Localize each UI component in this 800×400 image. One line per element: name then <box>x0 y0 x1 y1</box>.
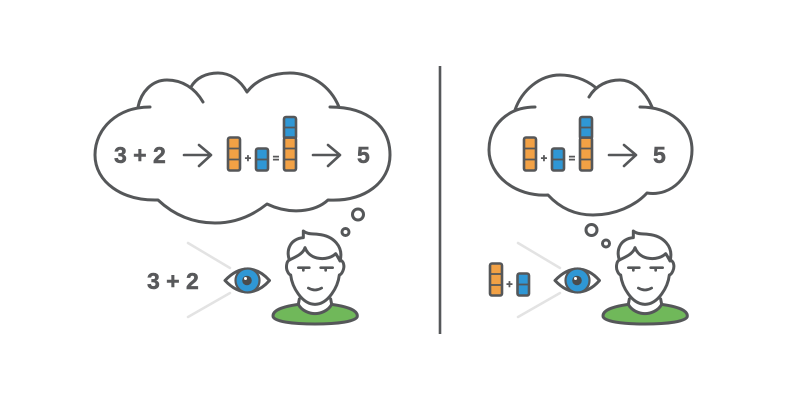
block stack: two blue <box>518 274 529 296</box>
shirt <box>603 304 687 324</box>
divider <box>439 66 441 334</box>
shirt <box>273 304 357 324</box>
panel: left <box>95 73 390 324</box>
plus sign: + <box>506 279 513 291</box>
thought bubble: small <box>602 240 610 247</box>
arrow: to result <box>313 145 340 166</box>
plus sign: + <box>245 153 251 165</box>
blocks equation: left <box>228 117 296 170</box>
panel: right <box>489 75 692 324</box>
cloud outline: right <box>489 75 692 215</box>
equation text: 3 + 2: 3 + 2 <box>114 142 166 168</box>
block stack: two blue <box>256 148 268 170</box>
block stack: five combined <box>284 117 296 170</box>
block stack: three orange <box>228 138 240 170</box>
icon: eye <box>555 268 600 292</box>
cloud outline: left <box>95 73 390 223</box>
hair <box>288 231 341 261</box>
arrow: to blocks <box>184 145 211 166</box>
neck <box>628 299 662 304</box>
thought bubble: large <box>586 224 597 236</box>
block stack: two blue <box>552 148 564 170</box>
smile <box>638 288 652 290</box>
thought bubble: small <box>342 228 349 236</box>
block stack: five combined <box>580 117 592 170</box>
sight lines <box>188 243 230 317</box>
result: 5: 5 <box>357 142 370 168</box>
icon: person <box>273 231 357 324</box>
thought bubble: large <box>352 209 364 220</box>
eyes and brows <box>628 268 663 270</box>
eyes and brows <box>298 268 333 270</box>
neck <box>298 299 332 304</box>
equals sign: = <box>569 153 575 165</box>
blocks equation: right <box>524 117 592 170</box>
block stack: three orange <box>524 138 536 170</box>
icon: person <box>603 231 687 324</box>
equals sign: = <box>273 153 279 165</box>
result: 5: 5 <box>653 142 666 168</box>
problem text: 3 + 2: 3 + 2 <box>147 268 199 294</box>
problem blocks <box>490 264 529 296</box>
hair <box>618 231 671 261</box>
icon: eye <box>225 268 270 292</box>
smile <box>308 288 322 290</box>
block stack: three orange <box>490 264 502 296</box>
face <box>617 260 674 304</box>
plus sign: + <box>541 153 547 165</box>
face <box>287 260 344 304</box>
arrow: to result <box>609 145 636 166</box>
sight lines <box>518 243 560 317</box>
